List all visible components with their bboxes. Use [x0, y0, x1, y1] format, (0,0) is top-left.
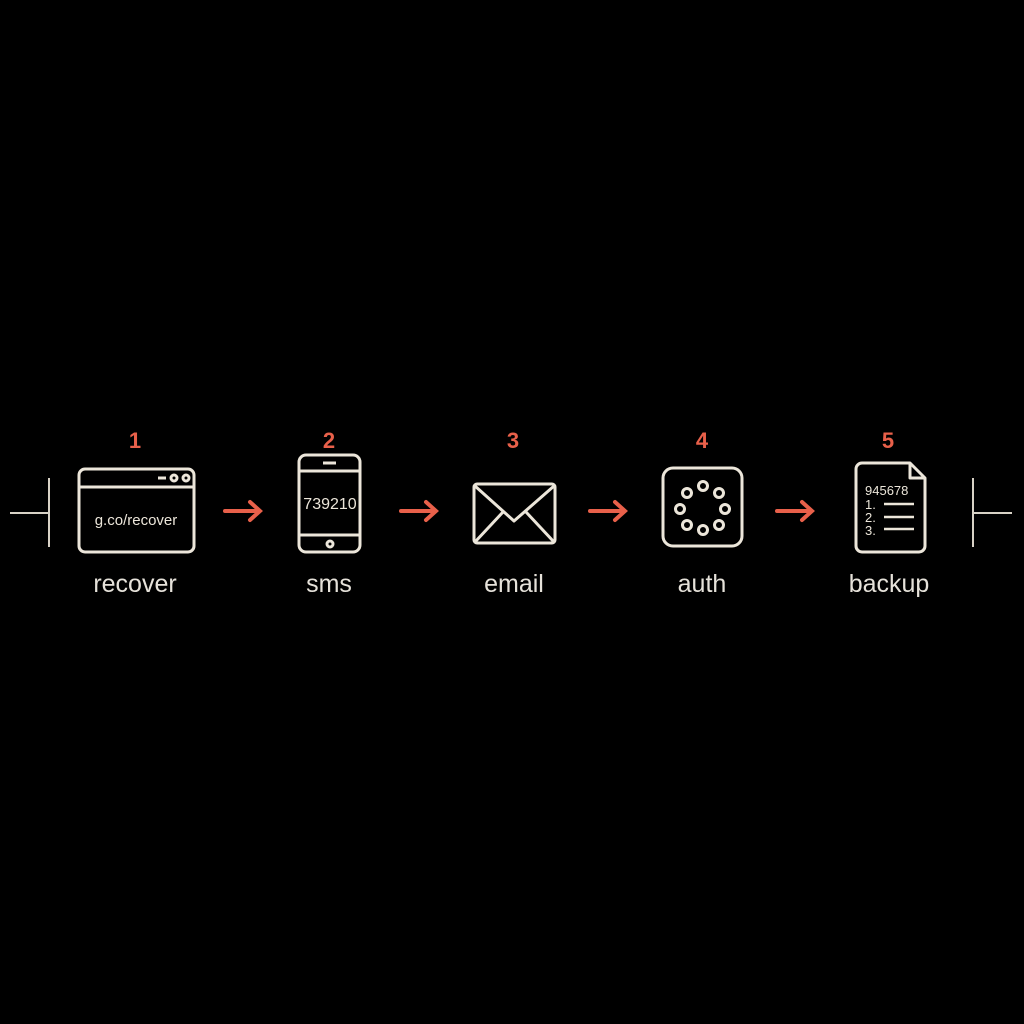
number 3: 3: [507, 428, 519, 453]
backup codes text: 3.: [865, 523, 876, 538]
step 1: recover: [79, 428, 194, 598]
number 2: 2: [323, 428, 335, 453]
number 4: 4: [696, 428, 709, 453]
icon: authenticator: [663, 468, 742, 546]
label backup: backup: [849, 570, 929, 598]
arrow 2: [401, 502, 436, 520]
sms code: 739210: [303, 496, 357, 513]
number 5: 5: [882, 428, 894, 453]
step 4: auth: [663, 428, 742, 598]
backup codes text: 1.: [865, 497, 876, 512]
icon: document: [856, 463, 925, 552]
arrow 4: [777, 502, 812, 520]
right bracket: [973, 478, 1012, 547]
label sms: sms: [306, 570, 352, 598]
step 3: email: [474, 428, 555, 598]
label email: email: [484, 570, 544, 598]
backup codes text: 945678: [865, 483, 908, 498]
label auth: auth: [678, 570, 726, 598]
icon: browser window: [79, 469, 194, 552]
url text: g.co/recover: [95, 512, 177, 529]
left bracket: [10, 478, 49, 547]
icon: envelope: [474, 484, 555, 543]
arrow 1: [225, 502, 260, 520]
backup codes text: 2.: [865, 510, 876, 525]
number 1: 1: [129, 428, 141, 453]
step 2: sms: [299, 428, 360, 598]
arrow 3: [590, 502, 625, 520]
backup codes text: [865, 483, 908, 538]
label recover: recover: [93, 570, 177, 598]
step 5: backup: [849, 428, 929, 598]
icon: phone: [299, 455, 360, 552]
